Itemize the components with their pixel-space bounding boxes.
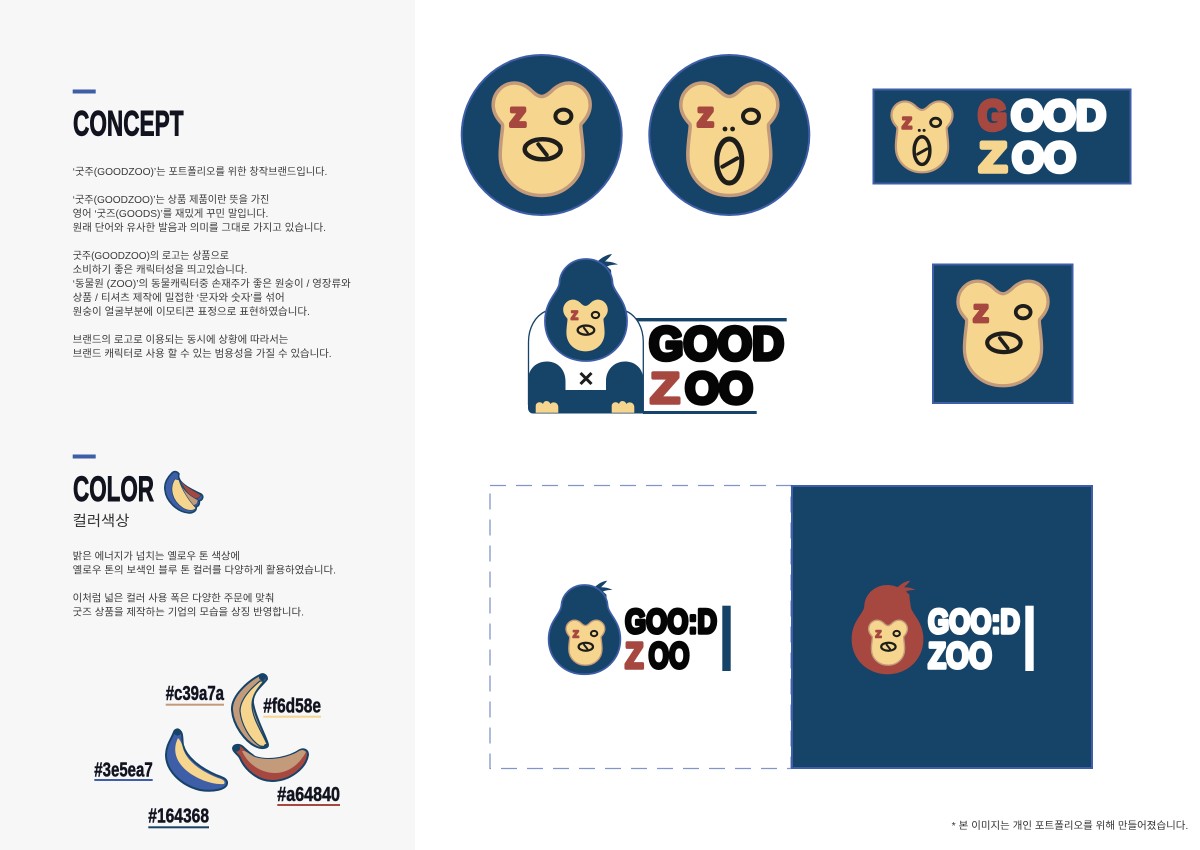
- heading: color: COLOR: [73, 470, 154, 509]
- icon: red gorilla head: [852, 581, 923, 674]
- icon: red gorilla head: Z: [875, 629, 882, 640]
- icon: surprised face: Z: [902, 116, 912, 133]
- text block: color description: 이처럼 넓은 컬러 사용 폭은 다양한 주문에 맞춰: [73, 592, 274, 604]
- wordmark: goo:d zoo: OO: [648, 635, 690, 676]
- text block: color description: 굿즈 상품을 제작하는 기업의 모습을 상징 반영합니다.: [73, 606, 304, 618]
- color label: 164368: #164368: [148, 806, 209, 828]
- icon: gorilla head: Z: [573, 629, 579, 640]
- wordmark: goo:d zoo white: [928, 603, 1020, 676]
- icon: mascot face: Z: [571, 311, 578, 323]
- wordmark: goo:d zoo white: ZOO: [928, 635, 992, 676]
- wordmark: good zoo: OO: [685, 364, 753, 413]
- top rule: [636, 318, 787, 321]
- text block: concept description: ‘굿주(GOODZOO)’는 상품 제품이란 뜻을 가진: [73, 194, 269, 206]
- text block: concept description: 굿주(GOODZOO)의 로고는 상품으로: [73, 250, 229, 262]
- panel: left sidebar: [0, 0, 415, 850]
- mascot head: [545, 254, 627, 361]
- wordmark: good zoo: GOOD: [649, 318, 784, 370]
- text block: concept description: ‘동물원 (ZOO)’의 동물캐릭터중 손재주가 좋은 원숭이 / 영장류와: [73, 278, 351, 290]
- text block: concept description: 원숭이 얼굴부분에 이모티콘 표정으로 표현하였습니다.: [73, 305, 310, 318]
- text block: color description: [73, 550, 336, 618]
- color label: a64840: #a64840: [277, 784, 340, 806]
- wordmark: goo:d zoo: GOO:D: [625, 603, 717, 641]
- text block: concept description: 브랜드의 로고로 이용되는 동시에 상황에 따라서는: [73, 334, 288, 346]
- icon: surprised face: [891, 101, 953, 172]
- heading: concept: CONCEPT: [73, 104, 184, 144]
- badge: sleeping monkey circle: [462, 55, 622, 215]
- logo: gorilla mascot with wordmark: [528, 254, 787, 414]
- text block: concept description: [73, 165, 351, 360]
- bottom rule: [643, 411, 757, 414]
- text block: concept description: ‘굿주(GOODZOO)’는 포트폴리오를 위한 창작브랜드입니다.: [73, 165, 327, 178]
- icon: x mark: [580, 373, 592, 384]
- text block: concept description: 상품 / 티셔츠 제작에 밀접한 ‘문자와 숫자’를 섞어: [73, 292, 285, 304]
- badge: square sleeping monkey: Z: [974, 300, 988, 326]
- text block: concept description: 브랜드 캐릭터로 사용 할 수 있는 범용성을 가질 수 있습니다.: [73, 348, 332, 360]
- panel: dark logo variant: [792, 486, 1092, 768]
- icon: tan and yellow banana: [232, 673, 268, 748]
- text block: concept description: 영어 ‘굿즈(GOODS)’를 재밌게 꾸민 말입니다.: [73, 207, 268, 220]
- text block: concept description: 원래 단어와 유사한 발음과 의미를 그대로 가지고 있습니다.: [73, 222, 326, 234]
- color label: c39a7a: #c39a7a: [166, 683, 225, 705]
- icon: red and tan banana: [233, 744, 308, 781]
- logo: horizontal banner: [874, 90, 1130, 184]
- wordmark: goo:d zoo: [625, 603, 717, 676]
- icon: gorilla head: [549, 581, 620, 674]
- icon: blue and yellow banana: [166, 728, 227, 791]
- icon: paws: [536, 401, 634, 413]
- icon: banana bunch: [165, 472, 203, 513]
- wordmark: goo:d zoo: Z: [625, 635, 644, 676]
- wordmark: good zoo: OOD: [1011, 92, 1106, 138]
- panel: light logo variant with dashed frame: [490, 486, 791, 768]
- badge: surprised monkey circle: [649, 55, 809, 215]
- text block: color description: 옐로우 톤의 보색인 블루 톤 컬러를 다양하게 활용하였습니다.: [73, 564, 336, 576]
- mascot body: [528, 311, 644, 414]
- badge: sleeping monkey circle: Z: [510, 104, 525, 132]
- vertical bar: [1025, 606, 1034, 671]
- wordmark: goo:d zoo white: GOO:D: [928, 603, 1020, 641]
- wordmark: good zoo: [649, 318, 784, 413]
- concept accent bar: [73, 90, 96, 94]
- footnote: * 본 이미지는 개인 포트폴리오를 위해 만들어졌습니다.: [952, 819, 1188, 832]
- wordmark: good zoo: Z: [979, 134, 1007, 180]
- wordmark: good zoo: G: [978, 92, 1007, 138]
- badge: square sleeping monkey: [933, 264, 1072, 403]
- wordmark: good zoo: OO: [1012, 134, 1076, 180]
- vertical bar: [722, 606, 731, 671]
- text block: concept description: 소비하기 좋은 캐릭터성을 띄고있습니다.: [73, 263, 247, 276]
- badge: surprised monkey circle: Z: [698, 104, 713, 132]
- color label: f6d58e: #f6d58e: [263, 696, 321, 718]
- color accent bar: [73, 454, 96, 458]
- color label: 3e5ea7: #3e5ea7: [94, 760, 153, 782]
- text block: color description: 밝은 에너지가 넘치는 옐로우 톤 색상에: [73, 550, 240, 562]
- subheading: color in korean: 컬러색상: [73, 513, 129, 530]
- wordmark: good zoo: [978, 92, 1106, 180]
- wordmark: good zoo: Z: [650, 364, 680, 413]
